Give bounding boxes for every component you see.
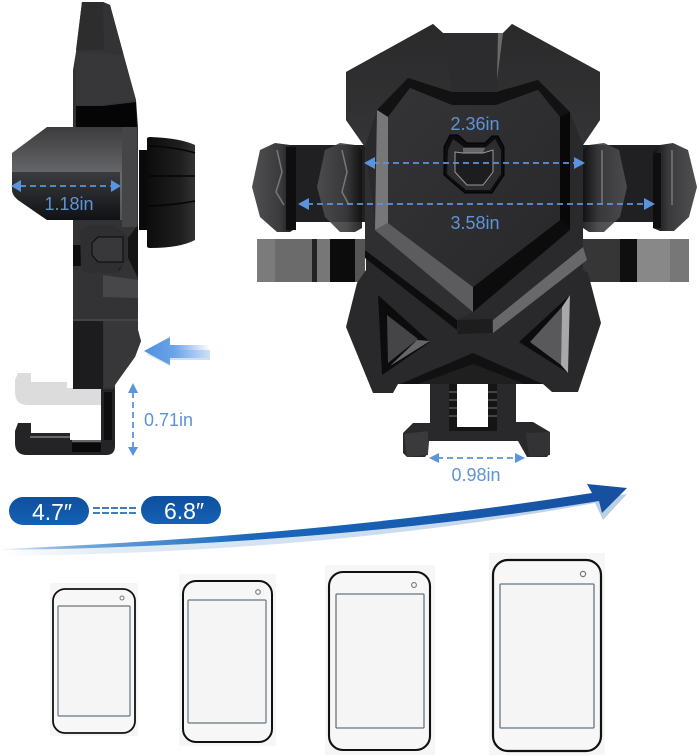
dashed connector <box>93 508 136 513</box>
size pill: 4.7 inch: 4.7″ <box>32 499 72 525</box>
upper right arm <box>580 143 697 232</box>
adjustment knob <box>139 150 149 230</box>
size pill: 6.8 inch <box>141 496 221 524</box>
shield bevels <box>377 78 570 117</box>
center badge <box>444 135 504 193</box>
chevron bands <box>365 250 457 330</box>
upper left arm <box>252 143 370 232</box>
side slider button <box>73 225 138 278</box>
dimension: 2.36in: 2.36in <box>450 114 500 134</box>
lower crease <box>400 353 543 384</box>
lower right arm <box>583 239 689 282</box>
front view of mount <box>252 24 697 457</box>
phone: small <box>50 583 138 736</box>
dimension: 1.18in <box>11 180 121 214</box>
phone: large <box>325 565 435 755</box>
dimension: 1.18in: 1.18in <box>44 194 94 214</box>
dimension: 0.71in <box>128 383 193 456</box>
dimension: 3.58in <box>298 198 655 233</box>
main body <box>73 2 141 389</box>
dimension: 0.98in: 0.98in <box>451 465 501 485</box>
size pill: 6.8 inch: 6.8″ <box>164 498 204 524</box>
dimension: 0.71in: 0.71in <box>144 410 193 430</box>
sweeping size arrow <box>0 484 627 556</box>
dimension: 3.58in: 3.58in <box>450 213 500 233</box>
right triangle vent <box>519 295 570 373</box>
left triangle vent <box>378 295 430 375</box>
dimension: 0.98in <box>429 453 525 485</box>
ghost clip position <box>15 373 101 405</box>
phone: medium <box>179 574 276 746</box>
dimension: 2.36in <box>364 114 585 169</box>
shield plate <box>388 88 560 287</box>
lower clip hook <box>15 385 115 455</box>
push arrow <box>144 337 210 366</box>
top wings <box>346 24 452 147</box>
foot bracket <box>403 380 550 457</box>
phone: extra large <box>489 553 605 755</box>
side view of mount <box>12 2 195 455</box>
main body shell <box>346 24 601 393</box>
thumb grip <box>12 127 122 220</box>
size pill: 4.7 inch <box>9 497 89 525</box>
lower left arm <box>257 239 365 282</box>
